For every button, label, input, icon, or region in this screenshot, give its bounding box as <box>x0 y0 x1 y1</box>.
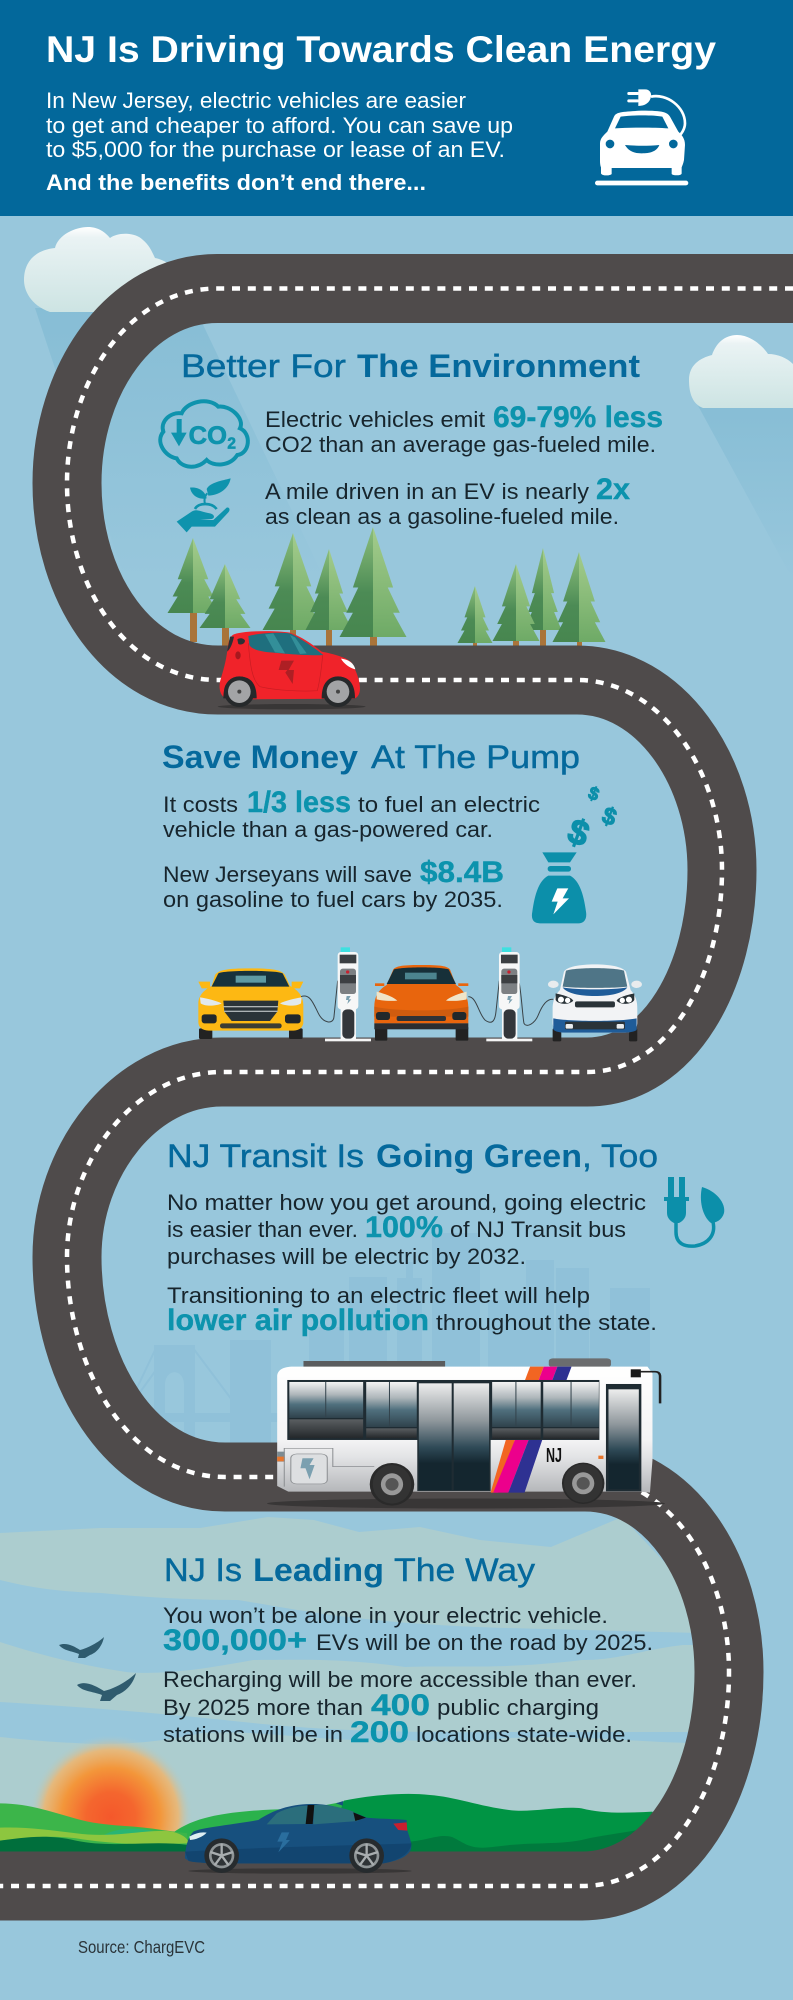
stat text: 2x <box>596 473 630 506</box>
icon: electric car with plug <box>595 89 688 185</box>
heading: Going Green <box>376 1138 582 1174</box>
intro text: In New Jersey, electric vehicles are easier <box>46 88 467 113</box>
blue electric car <box>185 1801 412 1874</box>
header banner <box>0 0 793 216</box>
stat text: 400 <box>371 1689 430 1722</box>
panel: NJ is leading the way <box>163 1552 653 1749</box>
heading: Save Money <box>162 739 358 775</box>
icon: money bag with dollar signs: $ <box>598 802 620 832</box>
heading: NJ Is <box>164 1552 242 1588</box>
source: Source: ChargEVC <box>78 1937 205 1957</box>
icon: money bag with dollar signs: $ <box>563 811 594 855</box>
white car <box>548 964 642 1041</box>
heading: The Way <box>394 1552 536 1588</box>
stat text: Electric vehicles emit <box>265 407 486 432</box>
stat text: CO2 than an average gas-fueled mile. <box>265 432 656 457</box>
stat text: 100% <box>365 1211 443 1244</box>
charger station left <box>301 947 371 1041</box>
orange car <box>374 965 468 1041</box>
heading <box>167 1138 658 1174</box>
stat text: EVs will be on the road by 2025. <box>316 1630 653 1655</box>
panel: better for the environment <box>160 348 663 532</box>
icon: CO2 cloud and plant hand: 2 <box>227 435 236 452</box>
charger station right <box>468 947 553 1041</box>
winding road <box>0 288 793 1886</box>
heading: At The Pump <box>371 739 580 775</box>
title: NJ Is Driving Towards Clean Energy <box>46 29 716 70</box>
row of electric cars and chargers <box>198 947 642 1041</box>
stat text <box>163 1603 653 1749</box>
stat text: throughout the state. <box>436 1310 657 1335</box>
intro text: to $5,000 for the purchase or lease of an EV. <box>46 137 505 162</box>
panel: NJ Transit is going green <box>167 1138 724 1337</box>
stat text: on gasoline to fuel cars by 2035. <box>163 887 503 912</box>
stat text: Recharging will be more accessible than ever. <box>163 1667 637 1692</box>
cloud light beam left <box>35 308 325 580</box>
heading: The Environment <box>357 348 640 384</box>
heading: Better For <box>181 348 346 384</box>
icon: CO2 cloud and plant hand <box>160 401 248 532</box>
stat text: 300,000+ <box>163 1624 307 1657</box>
stat text: A mile driven in an EV is nearly <box>265 479 590 504</box>
stat text: stations will be in <box>163 1722 343 1747</box>
trees <box>168 527 606 653</box>
stat text <box>265 401 663 529</box>
NJ Transit electric bus <box>267 1358 665 1508</box>
bridge <box>120 1345 295 1445</box>
stat text: purchases will be electric by 2032. <box>167 1244 526 1269</box>
icon: money bag with dollar signs: $ <box>586 783 602 805</box>
stat text: lower air pollution <box>167 1304 429 1337</box>
icon: money bag with dollar signs <box>532 783 620 923</box>
stat text: 200 <box>350 1716 409 1749</box>
stat text: to fuel an electric <box>358 792 540 817</box>
birds <box>59 1637 136 1701</box>
stat text: It costs <box>163 792 238 817</box>
heading: , Too <box>582 1138 658 1174</box>
sun <box>29 1735 193 1899</box>
red electric car <box>218 631 366 709</box>
stat text: 1/3 less <box>247 786 351 819</box>
stat text: of NJ Transit bus <box>450 1217 626 1242</box>
city skyline silhouette <box>120 1233 650 1445</box>
stat text: You won’t be alone in your electric vehicle. <box>163 1603 608 1628</box>
stat text: $8.4B <box>420 856 504 889</box>
stat text: vehicle than a gas-powered car. <box>163 817 493 842</box>
stat text: locations state-wide. <box>416 1722 632 1747</box>
stat text <box>163 786 540 912</box>
stat text: New Jerseyans will save <box>163 862 412 887</box>
cloud right <box>689 335 793 408</box>
cloud left <box>24 227 180 312</box>
stat text: is easier than ever. <box>167 1217 358 1242</box>
stat text: Transitioning to an electric fleet will help <box>167 1283 590 1308</box>
intro text <box>46 88 513 162</box>
stat text: public charging <box>437 1695 599 1720</box>
NJ logo on bus: NJ <box>546 1445 562 1467</box>
heading: NJ Transit Is <box>167 1138 364 1174</box>
cloud light beam right <box>696 402 793 580</box>
landscape: pale sky bands <box>0 1517 700 1860</box>
heading <box>164 1552 536 1588</box>
icon: plug with leaf <box>664 1177 724 1246</box>
heading <box>162 739 580 775</box>
stat text: No matter how you get around, going electric <box>167 1190 646 1215</box>
icon: CO2 cloud and plant hand: CO <box>189 423 227 450</box>
stat text: 69-79% less <box>493 401 663 434</box>
intro bold line: And the benefits don’t end there... <box>46 170 426 195</box>
green hills <box>0 1794 652 1857</box>
heading: Leading <box>253 1552 384 1588</box>
stat text <box>167 1190 657 1337</box>
intro text: to get and cheaper to afford. You can save up <box>46 113 513 138</box>
stat text: as clean as a gasoline-fueled mile. <box>265 504 619 529</box>
panel: save money at the pump <box>162 739 620 923</box>
stat text: By 2025 more than <box>163 1695 363 1720</box>
heading <box>181 348 640 384</box>
yellow car <box>198 968 303 1039</box>
